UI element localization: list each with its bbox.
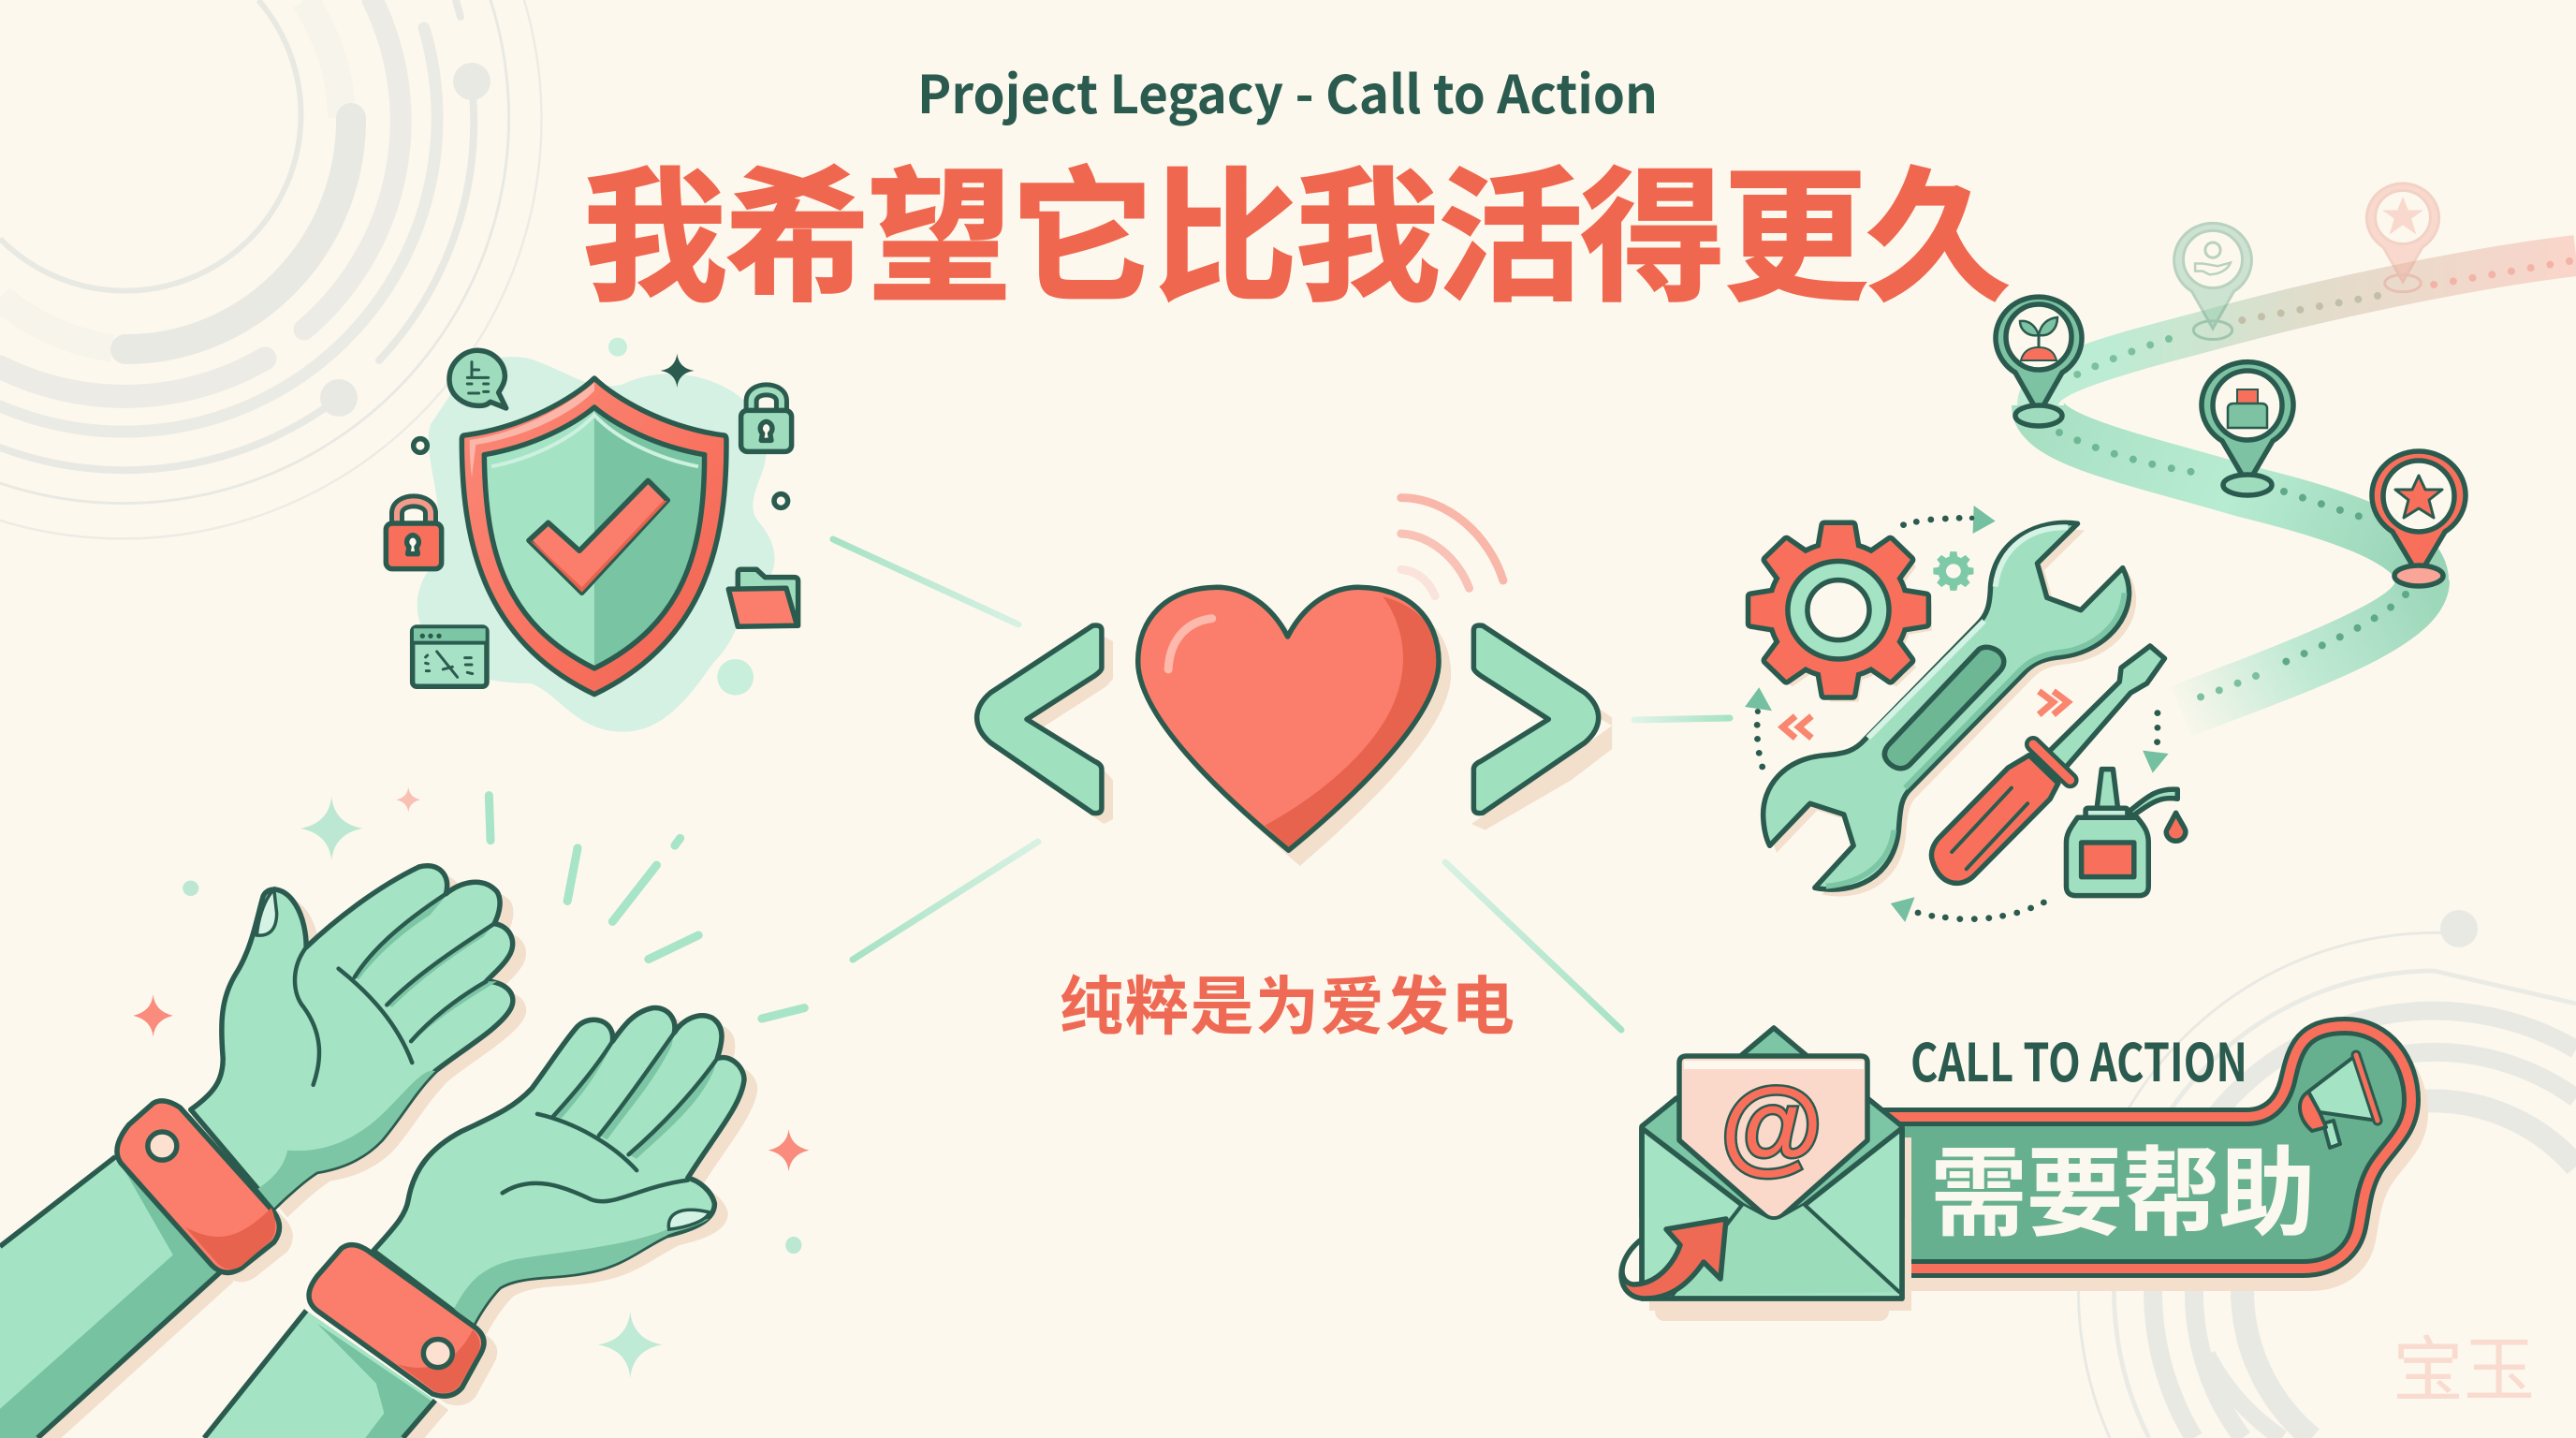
wrench shadow [1770,530,2136,896]
wrench [1764,522,2130,889]
small rings [414,439,788,507]
wrench shading [1826,527,2124,887]
pin: coral faded [2366,183,2439,292]
road dots [2059,261,2569,700]
lock green [741,389,792,451]
folder [728,569,798,626]
gear [1750,525,1932,702]
help text: 需要帮助 [1930,1140,2316,1249]
megaphone [2300,1055,2378,1148]
background rings: top left [0,0,542,538]
heart [1138,587,1439,850]
hands illustration [0,787,809,1438]
label: CALL TO ACTION [1910,1021,2247,1097]
subtitle: Project Legacy - Call to Action [917,53,1658,129]
pin: sprout [1996,297,2082,426]
inner highlight [491,415,698,466]
heart outline [1138,587,1439,850]
chevrons [1782,691,2068,738]
lower hand [373,1008,744,1326]
call to action banner [1621,1021,2419,1312]
road [2038,256,2576,712]
shadows [988,600,1612,866]
chat bubble [449,350,506,408]
sparkle [661,353,695,388]
heart highlight [1168,619,1212,669]
lower sleeve [204,1311,435,1438]
banner shadow [1664,1039,2419,1312]
oil can [2066,770,2186,896]
watermark: 宝玉 [2393,1331,2535,1411]
code window [413,627,487,686]
small gear [1933,551,1973,591]
upper cuff [117,1101,279,1272]
backdrop blob [417,357,775,732]
pin: star [2372,451,2466,586]
dotted arrows [1745,506,2169,922]
pin: box [2202,362,2293,495]
burst lines [489,796,804,1019]
envelope [1621,1028,1911,1311]
sparkles [133,787,809,1378]
decor dots [608,338,754,696]
envelope shadow [1649,1137,1911,1311]
left bracket [977,625,1102,814]
envelope outline [1642,1128,1902,1299]
wrench slot [1884,647,2004,769]
connector lines [833,539,1730,1030]
heart shade [1265,596,1439,850]
arrow [1621,1219,1726,1299]
banner [1881,1026,2411,1269]
check mark [529,480,667,593]
envelope back [1685,1028,1863,1103]
code heart icon [977,498,1612,866]
shield outer [461,378,726,695]
upper hand [191,866,513,1208]
shadows [0,875,757,1438]
tools illustration [1745,506,2186,922]
shield inner right [594,407,705,668]
signal waves [1401,498,1503,596]
winding road with pins [1996,183,2576,712]
upper sleeve [0,1157,220,1438]
shield inner left [484,407,594,668]
screwdriver [1931,646,2164,883]
lower cuff [309,1245,484,1396]
pin: hand faded [2174,223,2251,339]
inner outline [484,407,705,668]
background rings: bottom right [2078,910,2576,1438]
lock coral [386,501,442,569]
title: 我希望它比我活得更久 [582,157,2011,319]
shield left highlight [470,382,594,477]
caption: 纯粹是为爱发电 [1060,972,1515,1043]
shield illustration [386,338,798,732]
right bracket [1473,625,1599,814]
letter [1679,1056,1867,1219]
envelope front [1642,1128,1902,1299]
at sign: @ [1720,1066,1822,1183]
